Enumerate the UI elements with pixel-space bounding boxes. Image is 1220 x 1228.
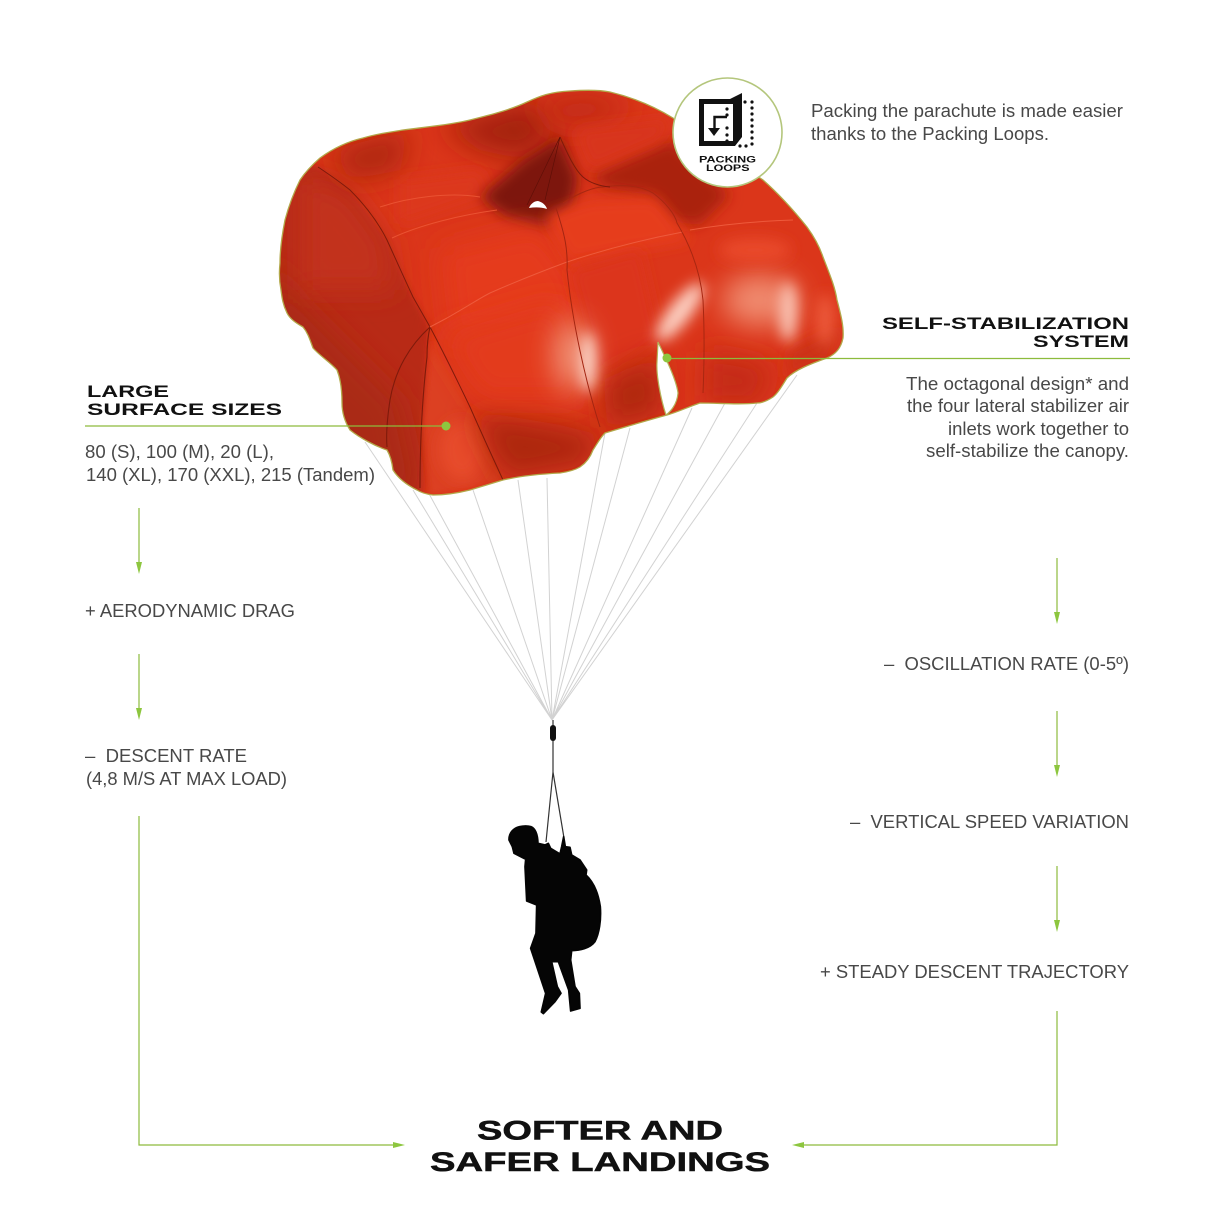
surface sizes text: 80 (S), 100 (M), 20 (L), [85, 441, 274, 462]
packing loops label: LOOPS [706, 163, 750, 173]
canopy shading [260, 90, 842, 500]
packing loops label: PACKING [699, 154, 756, 164]
stabilizer air inlet [657, 342, 678, 415]
oscillation rate: – OSCILLATION RATE (0-5º) [884, 653, 1129, 674]
surface sizes text: 140 (XL), 170 (XXL), 215 (Tandem) [86, 464, 375, 485]
pilot silhouette [509, 826, 601, 1014]
descent rate [85, 745, 287, 789]
risers and connector [546, 720, 564, 842]
large surface heading: SURFACE SIZES [87, 401, 282, 419]
descent rate: (4,8 M/S AT MAX LOAD) [86, 768, 287, 789]
canopy outline [279, 90, 843, 495]
stabilization text: self-stabilize the canopy. [926, 440, 1129, 461]
large surface heading: LARGE [87, 383, 169, 401]
stabilization text: The octagonal design* and [906, 373, 1129, 394]
steady descent trajectory: + STEADY DESCENT TRAJECTORY [820, 961, 1129, 982]
packing loops label [699, 154, 756, 173]
highlights [554, 319, 590, 391]
conclusion title: SAFER LANDINGS [430, 1147, 770, 1177]
arrow: to oscillation [1054, 558, 1060, 624]
aerodynamic drag: + AERODYNAMIC DRAG [85, 600, 295, 621]
descent rate: – DESCENT RATE [85, 745, 247, 766]
conclusion title: SOFTER AND [477, 1116, 723, 1146]
packing note: Packing the parachute is made easier [811, 100, 1123, 121]
large surface heading [87, 383, 282, 419]
arrow: right to landings [792, 1011, 1057, 1148]
packing loops icon [699, 93, 754, 148]
parachute canopy [278, 90, 844, 496]
arrow: to steady descent [1054, 866, 1060, 932]
suspension lines [365, 375, 797, 720]
crown vent opening [529, 201, 547, 209]
canopy seams [318, 137, 793, 488]
arrow: sizes to drag [136, 508, 142, 574]
packing note [811, 100, 1123, 144]
stabilization text [906, 373, 1129, 461]
vertical speed variation: – VERTICAL SPEED VARIATION [850, 811, 1129, 832]
stabilization text: inlets work together to [948, 418, 1129, 439]
vent dark [480, 137, 578, 228]
packing note: thanks to the Packing Loops. [811, 123, 1049, 144]
conclusion title [430, 1116, 770, 1177]
surface sizes text [85, 441, 375, 485]
self-stabilization heading: SYSTEM [1033, 333, 1129, 351]
leader: surface [85, 422, 450, 430]
self-stabilization heading [882, 315, 1129, 351]
self-stabilization heading: SELF-STABILIZATION [882, 315, 1129, 333]
leader: stabilization [662, 354, 1130, 362]
infographic [85, 77, 1130, 1172]
arrow: drag to descent [136, 654, 142, 720]
arrow: to vertical speed [1054, 711, 1060, 777]
stabilization text: the four lateral stabilizer air [907, 395, 1129, 416]
arrow: left to landings [139, 816, 405, 1148]
packing loops badge [673, 78, 782, 187]
